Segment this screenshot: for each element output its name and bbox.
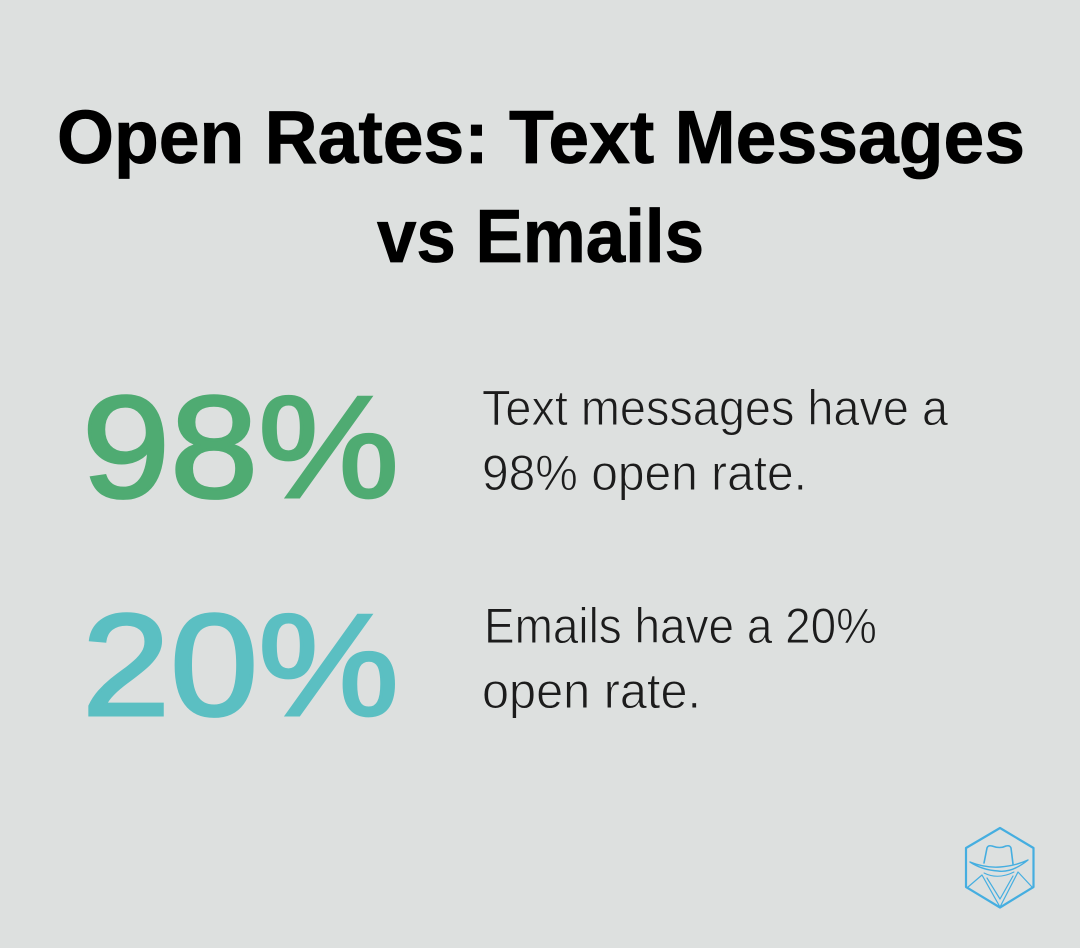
title (57, 95, 1025, 278)
title: vs Emails (377, 194, 704, 278)
stat: 20%: 20% (82, 584, 399, 746)
text block: text messages: Text messages have a (482, 380, 948, 436)
text block: text messages (482, 380, 948, 501)
stat: 98%: 98% (82, 366, 399, 528)
text block: text messages: 98% open rate. (482, 445, 807, 501)
text block: emails: open rate. (482, 663, 701, 719)
text block: emails (482, 598, 877, 719)
icon: hexagon logo with hat figure (966, 828, 1034, 908)
title: Open Rates: Text Messages (57, 95, 1025, 179)
text block: emails: Emails have a 20% (484, 598, 877, 654)
